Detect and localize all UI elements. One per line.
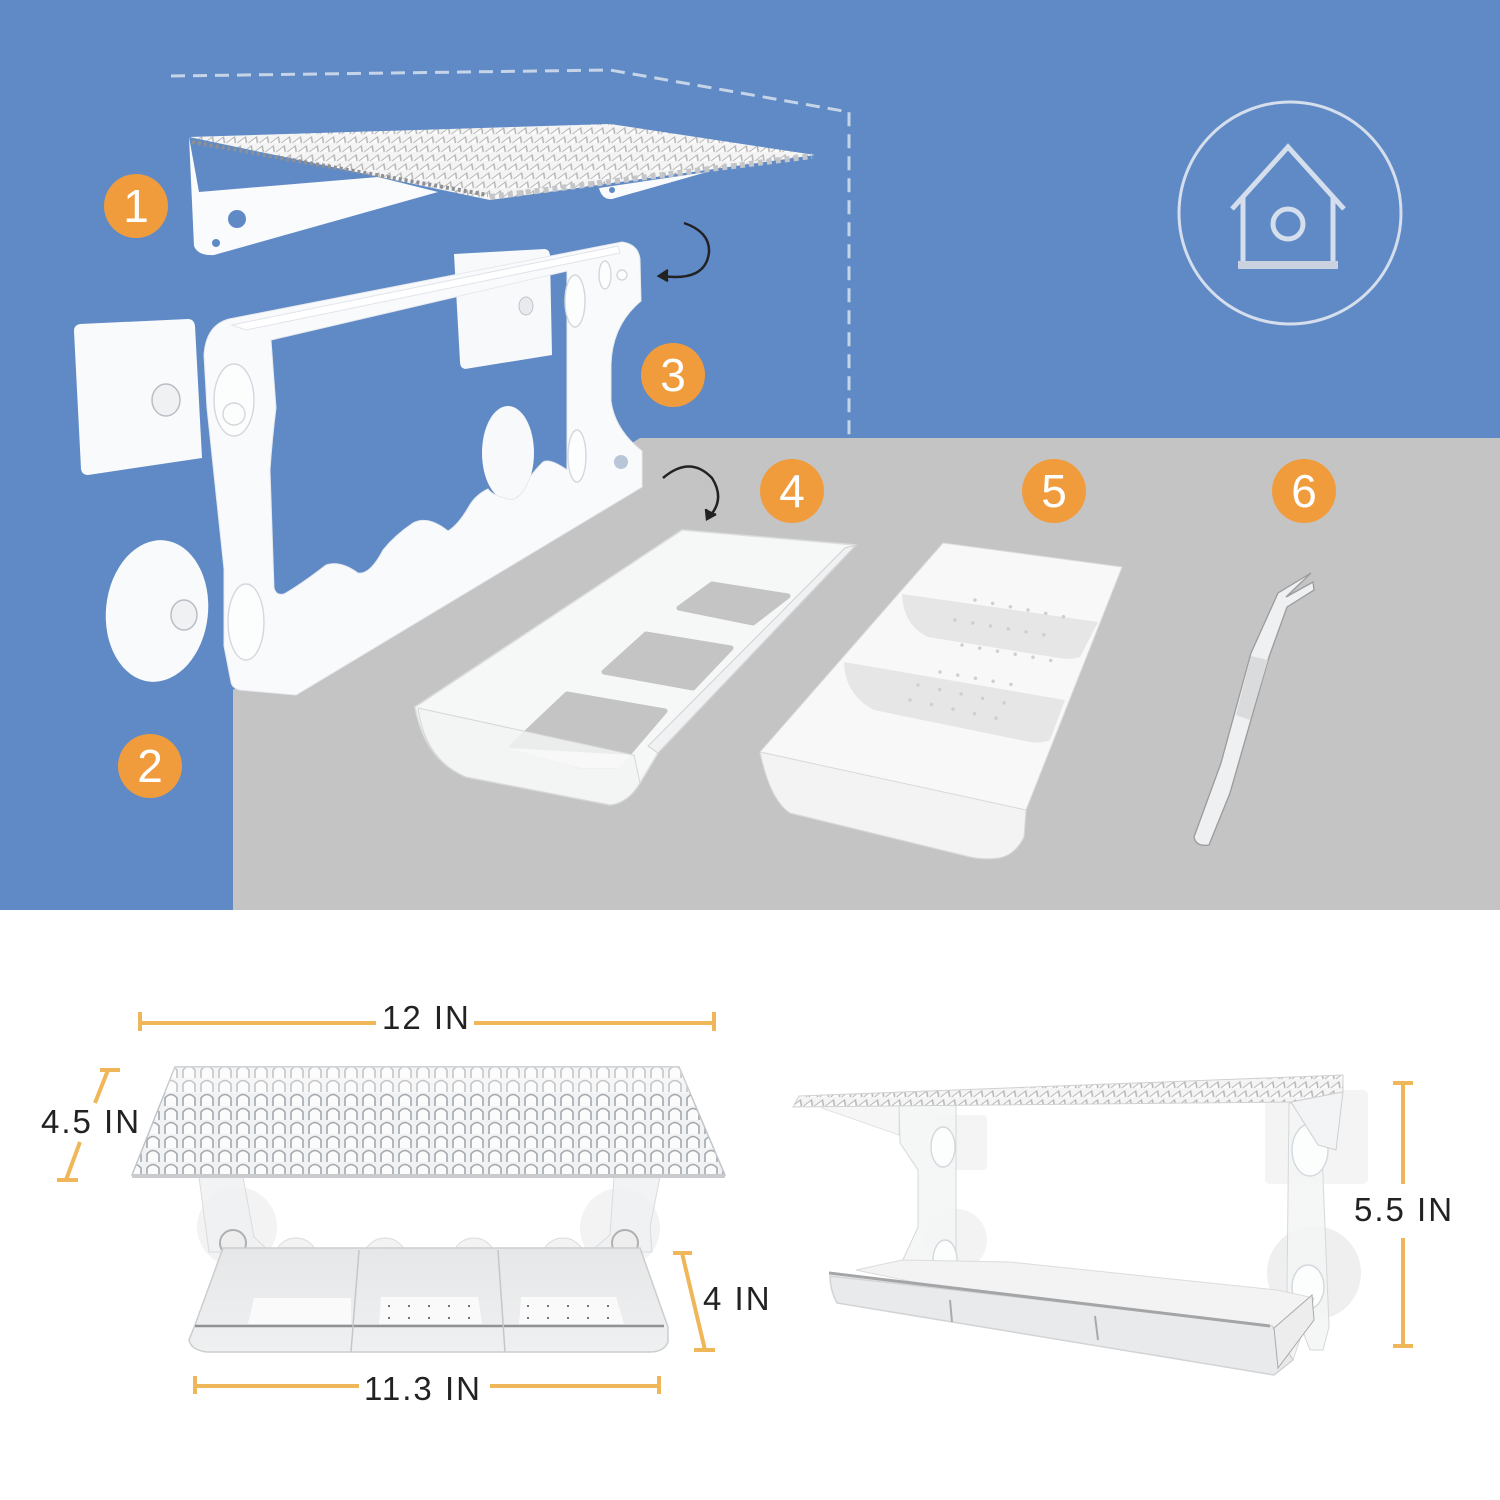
number badge 6 — [1272, 459, 1336, 523]
arrow: rotate bottom — [663, 466, 718, 519]
number badge 4 — [760, 459, 824, 523]
dimension: 4 IN — [673, 1253, 772, 1350]
side view product — [793, 1075, 1368, 1375]
dimension: 4.5 IN: 4.5 IN — [41, 1103, 141, 1140]
dimension: 11.3 IN: 11.3 IN — [364, 1370, 482, 1407]
number badge 3 — [641, 343, 705, 407]
part 2: suction cup back — [482, 406, 534, 500]
part 2: square pad back — [454, 249, 552, 369]
dimension: 4 IN: 4 IN — [703, 1280, 772, 1317]
number badge 1: 1 — [123, 180, 149, 232]
dimension: 11.3 IN — [195, 1370, 659, 1407]
number badge 1 — [104, 174, 168, 238]
part 3: mounting frame — [204, 242, 642, 695]
number badge 5 — [1022, 459, 1086, 523]
dimension: 5.5 IN: 5.5 IN — [1354, 1191, 1454, 1228]
number badge 2: 2 — [137, 740, 163, 792]
arrow: rotate top — [659, 223, 709, 281]
dashed outline — [171, 70, 849, 438]
number badge 3: 3 — [660, 349, 686, 401]
blue background — [0, 0, 1500, 910]
number badge 4: 4 — [779, 465, 805, 517]
dimension: 12 IN — [140, 999, 714, 1036]
number badge 6: 6 — [1291, 465, 1317, 517]
part 4: tray — [415, 530, 856, 805]
number badge 2 — [118, 734, 182, 798]
part 5: tray insert — [760, 543, 1122, 859]
number badge 5: 5 — [1041, 465, 1067, 517]
dimension: 12 IN: 12 IN — [382, 999, 471, 1036]
part 6: tweezers — [1194, 573, 1314, 845]
part 2: suction cup front — [99, 535, 215, 687]
front view product — [132, 1067, 725, 1352]
part 2: square pad front — [74, 319, 202, 475]
gray background — [233, 438, 1500, 910]
icon: birdhouse in circle — [1179, 102, 1401, 324]
part 1: roof — [189, 124, 815, 255]
dimension: 4.5 IN — [41, 1070, 141, 1180]
dimension: 5.5 IN — [1354, 1083, 1454, 1346]
